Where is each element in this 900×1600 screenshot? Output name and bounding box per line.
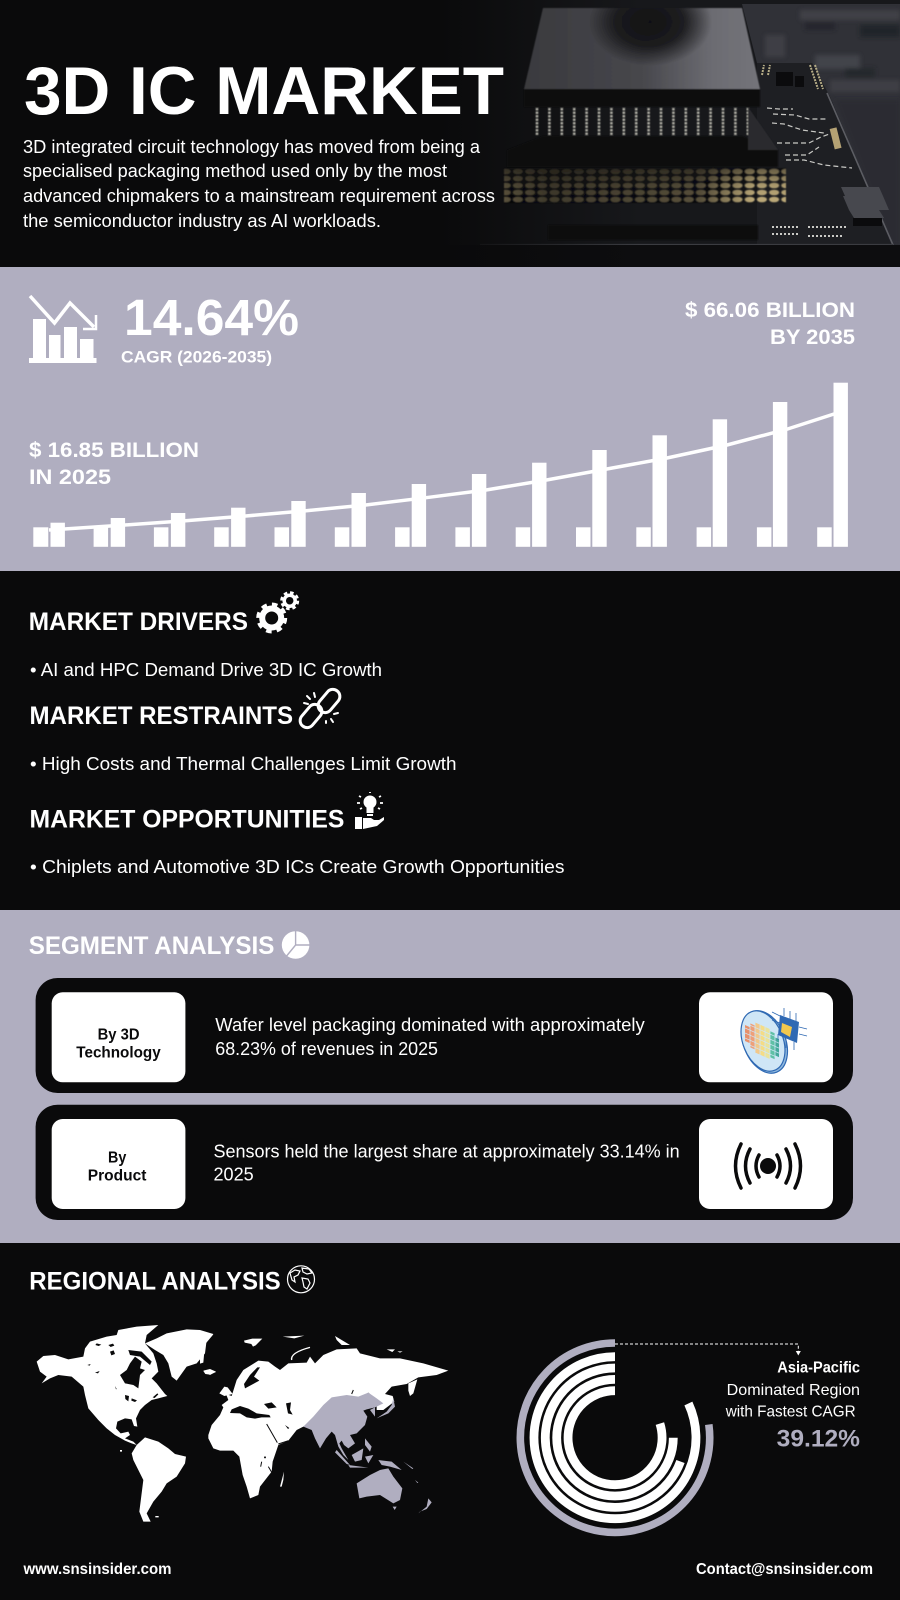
icon: hand holding light bulb	[355, 792, 384, 829]
label box: By	[108, 1149, 126, 1166]
icon: broken chain link	[297, 687, 343, 730]
label box	[52, 1119, 185, 1209]
icon box: sensor	[699, 1119, 833, 1209]
2025 base value: $ 16.85 BILLION	[29, 439, 199, 462]
description	[214, 1141, 680, 1185]
2035 forecast value: $ 66.06 BILLION	[685, 299, 855, 322]
description: 68.23% of revenues in 2025	[215, 1039, 438, 1059]
driver bullet: • AI and HPC Demand Drive 3D IC Growth	[30, 659, 382, 680]
callout: Asia-Pacific	[725, 1360, 860, 1453]
intro paragraph: specialised packaging method used only by the most	[23, 161, 447, 181]
intro paragraph: 3D integrated circuit technology has moved from being a	[23, 137, 481, 157]
chip photograph illustration	[480, 0, 900, 245]
2035 forecast value: BY 2035	[770, 326, 855, 349]
heading: segment analysis: SEGMENT ANALYSIS	[29, 932, 274, 960]
dashed callout arrow	[615, 1344, 801, 1356]
bar chart with growth line	[33, 383, 848, 547]
map: Americas and Greenland	[37, 1325, 216, 1522]
CAGR label: CAGR (2026-2035)	[121, 348, 272, 367]
description: Wafer level packaging dominated with approximately	[215, 1015, 645, 1035]
label box: Product	[88, 1168, 147, 1185]
2025 base value: IN 2025	[29, 466, 111, 489]
icon: gears	[258, 593, 298, 632]
intro paragraph: advanced chipmakers to a mainstream requirement across	[23, 186, 495, 206]
2035 forecast value	[685, 299, 855, 349]
callout: Asia-Pacific: Dominated Region	[727, 1382, 860, 1399]
panel: market size	[0, 267, 900, 571]
icon: pie chart	[282, 930, 310, 959]
opportunity bullet: • Chiplets and Automotive 3D ICs Create Growth Opportunities	[30, 856, 564, 877]
callout: Asia-Pacific: with Fastest CAGR	[725, 1404, 856, 1421]
hero panel	[23, 0, 900, 267]
intro paragraph	[23, 137, 495, 231]
description	[215, 1015, 645, 1059]
title: 3D IC MARKET	[24, 53, 504, 129]
callout: Asia-Pacific: 39.12%	[777, 1426, 860, 1453]
callout: Asia-Pacific: Asia-Pacific	[777, 1360, 860, 1377]
icon: globe	[288, 1266, 314, 1293]
card: by 3D technology	[36, 978, 853, 1093]
heading: market restraints: MARKET RESTRAINTS	[30, 702, 293, 730]
description: 2025	[214, 1165, 254, 1185]
panel: drivers, restraints, opportunities	[29, 593, 564, 877]
CAGR value: 14.64%	[124, 289, 299, 346]
heading: market opportunities: MARKET OPPORTUNITIES	[30, 806, 344, 834]
panel: segment analysis	[0, 910, 900, 1243]
panel: regional analysis	[29, 1266, 860, 1532]
restraint bullet: • High Costs and Thermal Challenges Limit Growth	[30, 753, 456, 774]
label box: Technology	[76, 1044, 161, 1061]
label box: By 3D	[98, 1026, 140, 1043]
world map	[37, 1325, 448, 1522]
intro paragraph: the semiconductor industry as AI workloads.	[23, 211, 381, 231]
description: Sensors held the largest share at approximately 33.14% in	[214, 1141, 680, 1161]
label box	[52, 992, 185, 1082]
heading: market drivers: MARKET DRIVERS	[29, 608, 248, 636]
donut chart	[520, 1343, 710, 1532]
footer: website: www.snsinsider.com	[23, 1561, 172, 1578]
card: by product	[36, 1105, 853, 1220]
map: Eurasia and Africa	[200, 1332, 448, 1513]
footer: contact: Contact@snsinsider.com	[696, 1561, 873, 1578]
2025 base value	[29, 439, 199, 489]
icon: bar chart with falling arrow	[29, 296, 96, 363]
heading: regional analysis: REGIONAL ANALYSIS	[29, 1267, 281, 1295]
icon box: wafer and chip	[699, 992, 833, 1082]
